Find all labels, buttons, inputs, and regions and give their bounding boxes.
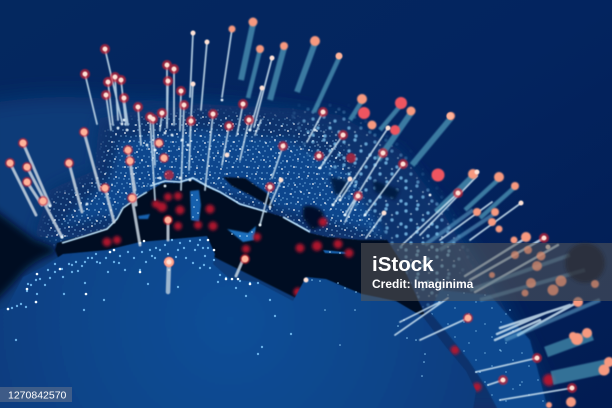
watermark logo: iStock: [372, 253, 434, 276]
land: Europe and Asia: [38, 104, 490, 396]
land: Arabia: [430, 290, 548, 408]
sea: Mediterranean: [55, 180, 425, 315]
land: Corsica and Sardinia: [190, 190, 201, 222]
city lights: North African coast: [8, 240, 520, 400]
land haze: [60, 130, 385, 235]
land: Crete: [323, 250, 347, 254]
land: Balearics: [138, 214, 150, 219]
fiber bases: bright nodes: [50, 100, 430, 237]
stock id label: [0, 387, 72, 402]
city lights: Europe fine: [38, 106, 388, 246]
balls seen through watermark: [489, 246, 599, 296]
sea glow: red lights: [102, 192, 555, 392]
land: Sicily: [227, 226, 256, 242]
sea: Adriatic: [223, 177, 273, 208]
city lights: Asia bokeh: [292, 104, 468, 308]
globe: far horizon haze: [0, 97, 550, 408]
stock id label: 1270842570: [8, 390, 67, 402]
fibers: thick out-of-focus: [241, 24, 608, 378]
watermark lens: [565, 243, 605, 283]
land: Africa: [0, 236, 476, 408]
balls: bright cores: [10, 33, 572, 388]
bright coast lines: [62, 178, 310, 243]
fiber glow: Asia bundle: [425, 210, 600, 340]
city lights: Arabia: [430, 290, 548, 408]
balls: large red out-of-focus: [358, 97, 444, 182]
sea: Aegean: [303, 206, 325, 230]
watermark credit: Credit: Imaginima: [372, 277, 474, 291]
balls: glow: [10, 49, 572, 388]
balls: peach out-of-focus: [228, 18, 612, 408]
sea: dark Atlantic: [0, 205, 57, 308]
island lights: [192, 195, 340, 253]
watermark band: [361, 243, 612, 301]
sea: Black Sea: [330, 177, 400, 200]
